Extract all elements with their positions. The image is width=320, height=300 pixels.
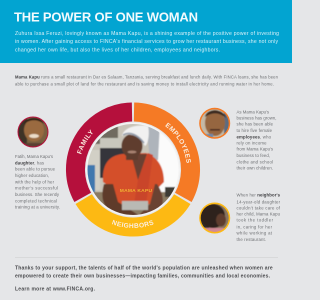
neighbors text: while working at (236, 230, 273, 235)
summary paragraph: able to purchase a small plot of land for the restaurant and is saving money to install electricity and running water in her home. (15, 82, 274, 86)
daughter text: daughter, has (15, 160, 44, 165)
employees text: rely on income (236, 140, 267, 145)
neighbors text (236, 193, 281, 242)
woman's dress (103, 153, 164, 204)
call to action: Learn more at www.FINCA.org. (15, 286, 96, 292)
employees text: employees, who (236, 134, 272, 139)
icon: employee portrait (199, 108, 231, 140)
summary paragraph (15, 74, 279, 86)
header intro text: in women. After gaining access to FINCA's financial services to grow her restaurant business, she not only (15, 39, 278, 45)
employees text: to hire five female (236, 128, 273, 133)
employees text: from Mama Kapu's (236, 147, 273, 152)
summary paragraph: Mama Kapu runs a small restaurant in Dar es Salaam, Tanzania, serving breakfast and lunch daily. With FINCA loans, she has been (15, 74, 279, 80)
header intro text (15, 31, 279, 53)
closing message (15, 265, 273, 292)
face (122, 134, 142, 158)
daughter text (15, 154, 60, 209)
employees text: their own children. (236, 165, 273, 170)
header intro text: changed her own life, but also the lives of her children, employees and neighbors. (15, 47, 220, 53)
title: THE POWER OF ONE WOMAN (14, 10, 198, 25)
head wrap (122, 125, 149, 146)
daughter text: mother's successful (15, 186, 58, 191)
label: neighbors: NEIGHBORS (112, 220, 154, 228)
segment: employees (134, 112, 191, 197)
employees text: business has grown, (236, 115, 276, 120)
employees text: business to feed, (236, 153, 270, 158)
label: family: FAMILY (77, 129, 93, 154)
neighbors text: took the toddler (236, 218, 274, 223)
employees text (236, 109, 276, 170)
employees text: clothe and school (236, 159, 273, 164)
neighbors text: her child, Mama Kapu (236, 212, 281, 217)
arms (102, 184, 140, 216)
daughter text: Fatih, Mama Kapu's (15, 154, 53, 159)
employees text: As Mama Kapu's (236, 109, 269, 114)
header panel (0, 0, 292, 63)
segment: neighbors (84, 199, 182, 227)
daughter text: higher education, (15, 173, 49, 178)
neighbors text: in, caring for her (236, 224, 273, 229)
label: employees: EMPLOYEES (165, 122, 191, 163)
icon: neighbor child portrait (199, 202, 230, 234)
segment: family (75, 112, 132, 197)
donut chart: family, employees, neighbors (66, 102, 200, 236)
neighbors text: When her neighbor's (236, 193, 281, 198)
closing message: empowered to create their own businesses—impacting families, communities and local economies. (15, 274, 271, 280)
neighbors text: 14-year-old daughter (236, 199, 281, 204)
neighbors text: the restaurant. (236, 237, 266, 242)
neighbors text: couldn't take care of (236, 205, 281, 210)
label: Mama Kapu: MAMA KAPU (120, 188, 152, 194)
closing message: Thanks to your support, the talents of half of the world's population are unleashed when women are (15, 265, 273, 271)
daughter text: completed technical (15, 198, 57, 203)
employees text: she has been able (236, 122, 274, 127)
daughter text: training at a university. (15, 204, 60, 209)
daughter text: with the help of her (15, 179, 55, 184)
icon: daughter portrait (17, 116, 49, 149)
central portrait: Mama Kapu (85, 122, 182, 218)
header intro text: Zuhura Issa Feruzi, lovingly known as Mama Kapu, is a shining example of the positive power of investing (15, 31, 279, 37)
daughter text: been able to pursue (15, 167, 56, 172)
daughter text: business. She recently (15, 192, 60, 197)
